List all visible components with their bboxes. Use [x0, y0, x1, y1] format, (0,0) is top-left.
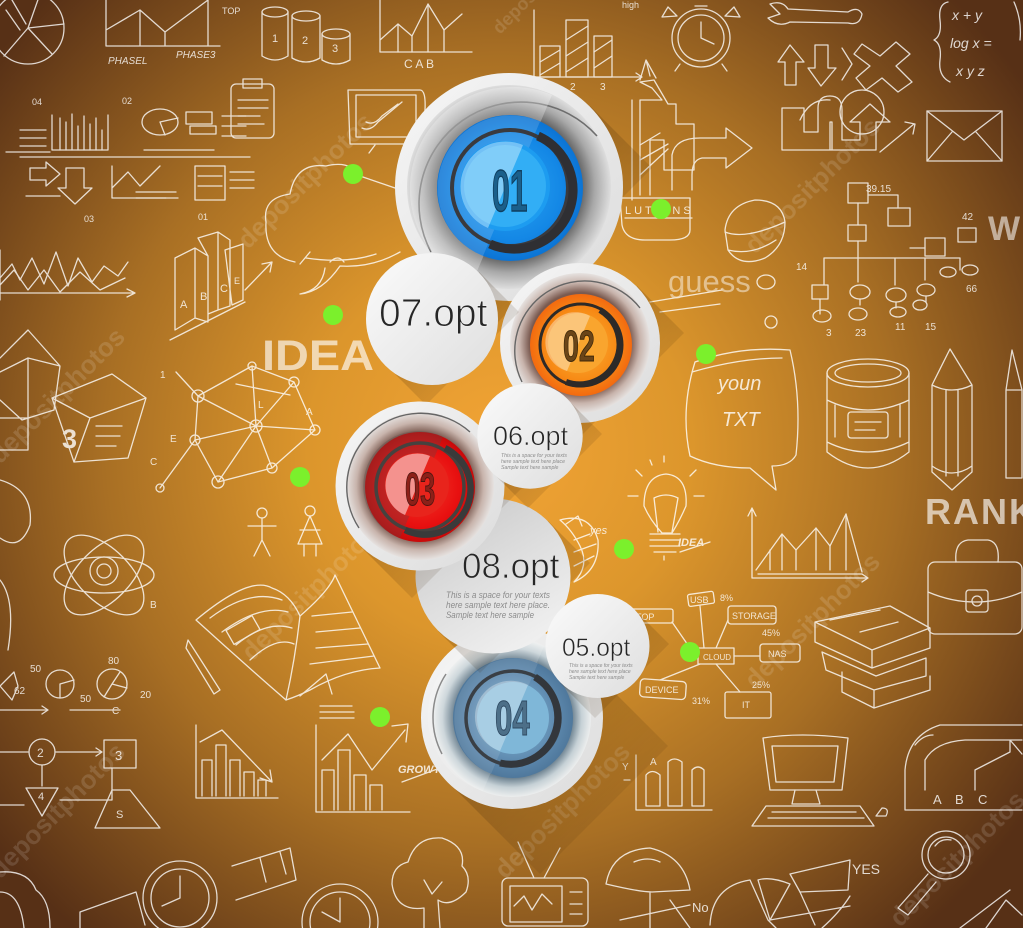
doodle: line chart [0, 250, 135, 300]
doodle: mind map: 45% [762, 628, 780, 638]
doodle: light bulb [628, 456, 710, 560]
doodle: open book [186, 575, 380, 700]
circle 06 [477, 383, 602, 508]
doodle: mind map: CLOUD [703, 653, 731, 662]
doodle: flow chart: 39.15 [866, 184, 891, 195]
description: here sample text here place [569, 669, 631, 675]
doodle: network: L [258, 400, 264, 411]
doodle: flow chart: 3 [826, 328, 832, 339]
doodle: W corner: W [988, 210, 1021, 248]
blue disc [437, 115, 583, 261]
doodle: network: 1 [160, 370, 166, 381]
doodle: flow chart: 14 [796, 262, 808, 273]
doodle: flow chart: 42 [962, 212, 974, 223]
doodle: formulas [934, 2, 1020, 82]
doodle: flow diagram: 4 [38, 791, 44, 803]
doodle: dashboard: 02 [122, 96, 132, 106]
doodle: line chart C A B: C A B [404, 57, 434, 71]
doodle: network: E [170, 434, 177, 445]
doodle: guess text [650, 264, 751, 312]
doodle: solutions box: LUTIONS [625, 205, 694, 217]
doodle: cans: 3 [332, 43, 338, 55]
doodle: mind map: 31% [692, 696, 710, 706]
doodle: growth chart: GROWTH [398, 764, 449, 776]
description: This is a space for your texts [446, 590, 550, 600]
number 01: 01 [492, 159, 527, 223]
doodle: 3D bar chart lower: Y [622, 762, 629, 773]
doodle: curved arrows [782, 90, 915, 152]
watermarks: depositphotos [235, 518, 383, 666]
doodle: speech bubble: TXT [722, 409, 762, 431]
description: Sample text here sample [501, 465, 558, 471]
doodle: small pies row [0, 656, 152, 717]
doodle: 3D bar chart: B [200, 291, 207, 303]
doodle: magnifier [898, 831, 1022, 928]
doodle: 3D bar chart lower [622, 755, 712, 810]
doodle: stick figures [248, 506, 322, 556]
description [569, 663, 633, 681]
doodle: dashboard [6, 96, 254, 224]
doodle: small pies row: 50 [30, 664, 42, 675]
doodle: pencils [932, 349, 1022, 490]
doodle: tree cloud [392, 838, 468, 928]
orange disc [530, 294, 632, 396]
circle 03 [336, 402, 532, 598]
description: This is a space for your texts [569, 663, 633, 669]
doodle: phase chart: PHASEL [108, 56, 147, 67]
doodle: folder chart: C [978, 792, 987, 807]
doodle: hatched bar chart: high [622, 0, 639, 10]
doodle: yes swirl: yes [589, 525, 608, 537]
doodle: network: A [306, 407, 313, 418]
doodle: bottom left sketch [0, 872, 50, 928]
circle 07 [366, 253, 519, 405]
doodle: cans [262, 7, 350, 64]
doodle: mind map [625, 591, 800, 718]
doodle: mind map: 25% [752, 680, 770, 690]
doodle: clipboard [231, 79, 274, 138]
doodle: 3D bar chart: A [180, 299, 188, 311]
doodle: IDEA lettering: IDEA [262, 332, 374, 380]
doodle: thought cloud [266, 164, 400, 294]
doodle: wrist watch [80, 848, 378, 928]
doodle: atom [0, 480, 158, 650]
doodle: small pies row: 20 [140, 690, 152, 701]
watermarks: depositphotos [738, 111, 886, 259]
green marker dots [290, 164, 716, 727]
doodle: formulas: log x = [950, 35, 992, 51]
doodle: mind map: STORAGE [732, 611, 776, 621]
doodle: speech bubble [686, 349, 798, 490]
doodle: guess text: guess [668, 264, 751, 299]
doodle: light bulb: IDEA [678, 537, 704, 549]
doodle: cans: 2 [302, 35, 308, 47]
doodle: 3D bar chart [170, 232, 272, 340]
doodle: hatched bar chart [534, 0, 642, 93]
doodle: flow diagram [0, 739, 160, 828]
doodle: desk lamp [606, 848, 690, 928]
doodle: folder chart: A [933, 792, 942, 807]
doodle: small pies row: 50 [80, 694, 92, 705]
circle 05 [546, 594, 669, 718]
doodle: mind map: USB [690, 595, 709, 605]
circle 04 [421, 627, 668, 874]
doodle: cans: 1 [272, 33, 278, 45]
doodle: cubes [0, 330, 146, 462]
doodle: pie chart top left [0, 0, 64, 64]
doodle: declining chart [196, 725, 278, 798]
doodle: flow chart: 23 [855, 328, 867, 339]
description: Sample text here sample [569, 675, 625, 681]
number 03: 03 [405, 465, 435, 516]
doodle: folder chart: B [955, 792, 964, 807]
doodle: mind map: NAS [768, 649, 787, 659]
doodle: cubes: 3 [62, 424, 77, 454]
doodle: network: C [150, 457, 157, 468]
doodle: mind map: DEVICE [645, 685, 679, 695]
doodle: outlined arrows [778, 42, 912, 92]
doodle: television [502, 842, 588, 926]
doodle: phase chart [106, 0, 240, 67]
doodle: growth chart [316, 706, 449, 812]
doodle: flow chart [796, 183, 978, 339]
watermarks: depositphotos [738, 546, 886, 694]
doodle: exploded pie [692, 860, 880, 928]
doodle: dashboard: 01 [198, 212, 208, 222]
doodle: 3D bar chart: C [220, 283, 228, 295]
description: This is a space for your texts [501, 453, 567, 459]
doodle: formulas: x y z [955, 63, 985, 79]
circle 01 [395, 73, 652, 330]
circle 06: 06.opt [493, 421, 569, 451]
doodle: monitor with chart [348, 90, 425, 153]
circle 02 [500, 263, 684, 447]
doodle: mind map: IT [742, 700, 751, 710]
doodle: phase chart: PHASE3 [176, 50, 216, 61]
description: Sample text here sample [446, 610, 534, 620]
doodle: small pies row: 62 [14, 686, 26, 697]
description: here sample text here place. [446, 600, 550, 610]
doodle: flow diagram: 2 [37, 746, 44, 760]
doodle: alarm clock [662, 6, 740, 71]
doodle: computer [752, 735, 887, 826]
doodle: mountain chart [748, 508, 868, 582]
doodle: disc [725, 200, 785, 328]
doodle: small pies row: C [112, 706, 119, 717]
doodle: mind map: 8% [720, 593, 733, 603]
doodle: flow chart: 66 [966, 284, 978, 295]
doodle: dashboard: 03 [84, 214, 94, 224]
doodle: folder chart [905, 725, 1022, 810]
doodle: envelope [927, 111, 1002, 161]
watermarks: depositphotos [488, 736, 636, 884]
circle 07: 07.opt [379, 292, 488, 335]
doodle: 3D bar chart: E [234, 276, 240, 286]
number 02: 02 [563, 321, 595, 370]
doodle: business arrows [632, 60, 752, 200]
doodle: solutions box [620, 198, 694, 240]
doodle: network [150, 362, 320, 492]
doodle: flow chart: 11 [895, 322, 906, 333]
doodle: yes swirl [560, 516, 608, 582]
doodle: exploded pie: No [692, 900, 709, 915]
doodle: small pies row: 80 [108, 656, 120, 667]
description [446, 590, 550, 620]
doodle: hatched bar chart: 3 [600, 82, 606, 93]
doodle: flow diagram: S [116, 809, 123, 821]
circle 08: 08.opt [462, 547, 560, 586]
doodle: stack of books [815, 606, 930, 708]
doodle: flow diagram: 3 [115, 748, 122, 763]
red disc [365, 432, 475, 542]
circle 05: 05.opt [562, 635, 631, 662]
doodle: hatched bar chart: 2 [570, 82, 576, 93]
doodle: 3D bar chart lower: A [650, 757, 657, 768]
doodle: phase chart: TOP [222, 6, 240, 16]
description [501, 453, 567, 471]
circle 08 [416, 498, 590, 673]
doodle: mind map: PTOP [630, 612, 654, 622]
doodle: tin can [827, 359, 909, 468]
doodle: flow chart: 15 [925, 322, 937, 333]
doodle: atom: B [150, 600, 157, 611]
doodle: formulas: x + y [951, 7, 983, 23]
number 04: 04 [495, 691, 530, 746]
doodle: speech bubble: youn [716, 373, 761, 395]
doodle: dashboard: 04 [32, 97, 42, 107]
description: here sample text here place [501, 459, 565, 465]
doodle: briefcase [928, 540, 1022, 634]
watermarks: depositphotos [231, 106, 379, 254]
doodle: exploded pie: YES [852, 861, 880, 877]
steel disc [453, 658, 573, 778]
doodle: line chart C A B [380, 0, 472, 71]
doodle: wrench [768, 3, 862, 24]
